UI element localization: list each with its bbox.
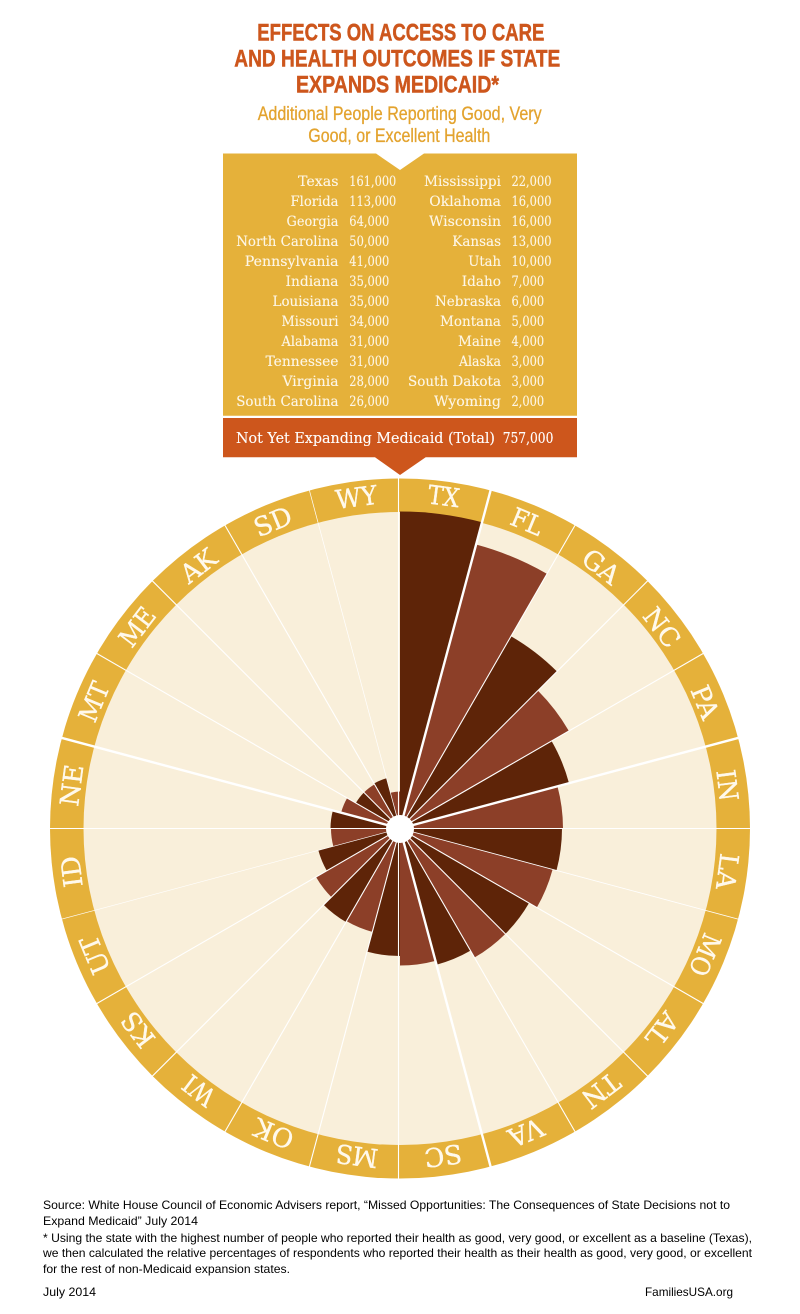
table column: highest states: 161,000 <box>349 174 396 190</box>
table column: lower states: 3,000 <box>512 354 544 370</box>
table column: highest states: South Carolina <box>236 394 338 410</box>
table column: lower states: 3,000 <box>512 374 544 390</box>
state labels around ring: PA <box>684 681 725 725</box>
subtitle: Additional People Reporting Good, Very <box>258 104 542 125</box>
table column: lower states: Wyoming <box>434 394 501 410</box>
title: EXPANDS MEDICAID* <box>296 72 499 99</box>
table column: highest states: 26,000 <box>349 394 389 410</box>
table column: highest states: Georgia <box>286 214 338 230</box>
table column: highest states: Alabama <box>281 334 338 350</box>
state labels around ring <box>55 479 745 1174</box>
table column: highest states: Louisiana <box>272 294 338 310</box>
footer website: FamiliesUSA.org <box>645 1285 733 1299</box>
state labels around ring: AL <box>638 1005 684 1052</box>
table column: lower states: Utah <box>468 254 501 270</box>
state labels around ring: SC <box>422 1137 464 1172</box>
state labels around ring: VA <box>502 1110 549 1153</box>
state labels around ring: OK <box>249 1111 299 1154</box>
total bar with downward arrow: Not Yet Expanding Medicaid (Total) <box>236 431 495 447</box>
table column: lower states: 10,000 <box>512 254 552 270</box>
table column: lower states: 7,000 <box>512 274 544 290</box>
chart ring <box>50 478 750 1178</box>
subtitle: Good, or Excellent Health <box>308 126 490 147</box>
table column: lower states: Kansas <box>452 234 501 250</box>
state labels around ring: NC <box>636 602 686 654</box>
table column: lower states: 6,000 <box>512 294 544 310</box>
table column: lower states: 4,000 <box>512 334 544 350</box>
state labels around ring: AK <box>174 543 224 591</box>
table column: highest states: 64,000 <box>349 214 389 230</box>
table column: lower states: Idaho <box>462 274 501 290</box>
table column: lower states: South Dakota <box>408 374 501 390</box>
table column: highest states: Pennsylvania <box>245 254 338 270</box>
table column: lower states: 16,000 <box>512 194 552 210</box>
subtitle <box>258 104 542 147</box>
state labels around ring: UT <box>74 930 117 978</box>
state labels around ring: WI <box>177 1068 222 1112</box>
table column: highest states: Indiana <box>286 274 338 290</box>
table column: highest states: Texas <box>298 174 338 190</box>
table column: highest states: 113,000 <box>349 194 396 210</box>
title: EFFECTS ON ACCESS TO CARE <box>257 20 544 47</box>
table column: highest states: 41,000 <box>349 254 389 270</box>
table column: lower states: 5,000 <box>512 314 544 330</box>
source note <box>43 1198 730 1228</box>
title <box>234 20 560 99</box>
state labels around ring: MO <box>682 929 727 981</box>
state labels around ring: KS <box>116 1005 162 1053</box>
footnote: for the rest of non-Medicaid expansion states. <box>43 1262 290 1276</box>
table column: highest states: 28,000 <box>349 374 389 390</box>
state labels around ring: TX <box>426 479 462 514</box>
table column: highest states: 31,000 <box>349 334 389 350</box>
table background with notch <box>223 154 577 416</box>
state labels around ring: TN <box>575 1065 625 1114</box>
state labels around ring: LA <box>709 852 743 892</box>
state labels around ring: WY <box>334 479 379 515</box>
state labels around ring: GA <box>575 544 626 592</box>
table column: lower states: Oklahoma <box>429 194 501 210</box>
footnote: we then calculated the relative percentages of respondents who reported their health as their health as good, very good, or excellent <box>42 1246 753 1260</box>
table column: lower states: Montana <box>440 314 501 330</box>
source note: Source: White House Council of Economic Advisers report, “Missed Opportunities: The Consequences of State Decisions not to <box>43 1198 730 1212</box>
table column: highest states: Florida <box>290 194 338 210</box>
radial chart <box>49 478 751 1180</box>
chart field <box>84 512 716 1145</box>
state labels around ring: IN <box>710 768 745 803</box>
state labels around ring: MS <box>334 1138 380 1174</box>
total bar with downward arrow <box>223 418 577 475</box>
total bar with downward arrow: 757,000 <box>503 431 553 447</box>
table column: lower states: Maine <box>458 334 501 350</box>
table column: highest states <box>236 174 396 410</box>
state labels around ring: ME <box>113 601 162 653</box>
footer date: July 2014 <box>43 1285 96 1299</box>
state labels around ring: SD <box>250 501 297 544</box>
table column: highest states: 31,000 <box>349 354 389 370</box>
table column: highest states: 50,000 <box>349 234 389 250</box>
title: AND HEALTH OUTCOMES IF STATE <box>234 46 560 72</box>
state labels around ring: ID <box>56 854 90 889</box>
table column: highest states: 34,000 <box>349 314 389 330</box>
table column: highest states: Missouri <box>282 314 339 330</box>
state labels around ring: FL <box>506 502 548 542</box>
table column: lower states <box>408 174 552 410</box>
table column: lower states: Alaska <box>458 354 501 370</box>
table column: highest states: Tennessee <box>266 354 338 370</box>
table column: lower states: 2,000 <box>512 394 544 410</box>
table column: lower states: 13,000 <box>512 234 552 250</box>
table column: lower states: Nebraska <box>435 294 501 310</box>
table column: highest states: 35,000 <box>349 294 389 310</box>
table column: lower states: Mississippi <box>424 174 501 190</box>
table column: highest states: 35,000 <box>349 274 389 290</box>
table column: lower states: 22,000 <box>512 174 552 190</box>
footnote <box>42 1231 753 1276</box>
table column: highest states: North Carolina <box>236 234 338 250</box>
table column: highest states: Virginia <box>282 374 338 390</box>
source note: Expand Medicaid” July 2014 <box>43 1214 198 1228</box>
state labels around ring: NE <box>55 763 90 808</box>
table column: lower states: Wisconsin <box>429 214 501 230</box>
table column: lower states: 16,000 <box>512 214 552 230</box>
footnote: * Using the state with the highest number of people who reported their health as good, very good, or excellent as a baseline (Texas), <box>43 1231 752 1245</box>
state labels around ring: MT <box>73 677 116 726</box>
panel: state data table <box>223 154 577 416</box>
center hole <box>386 815 414 843</box>
wedges by state <box>314 512 574 970</box>
